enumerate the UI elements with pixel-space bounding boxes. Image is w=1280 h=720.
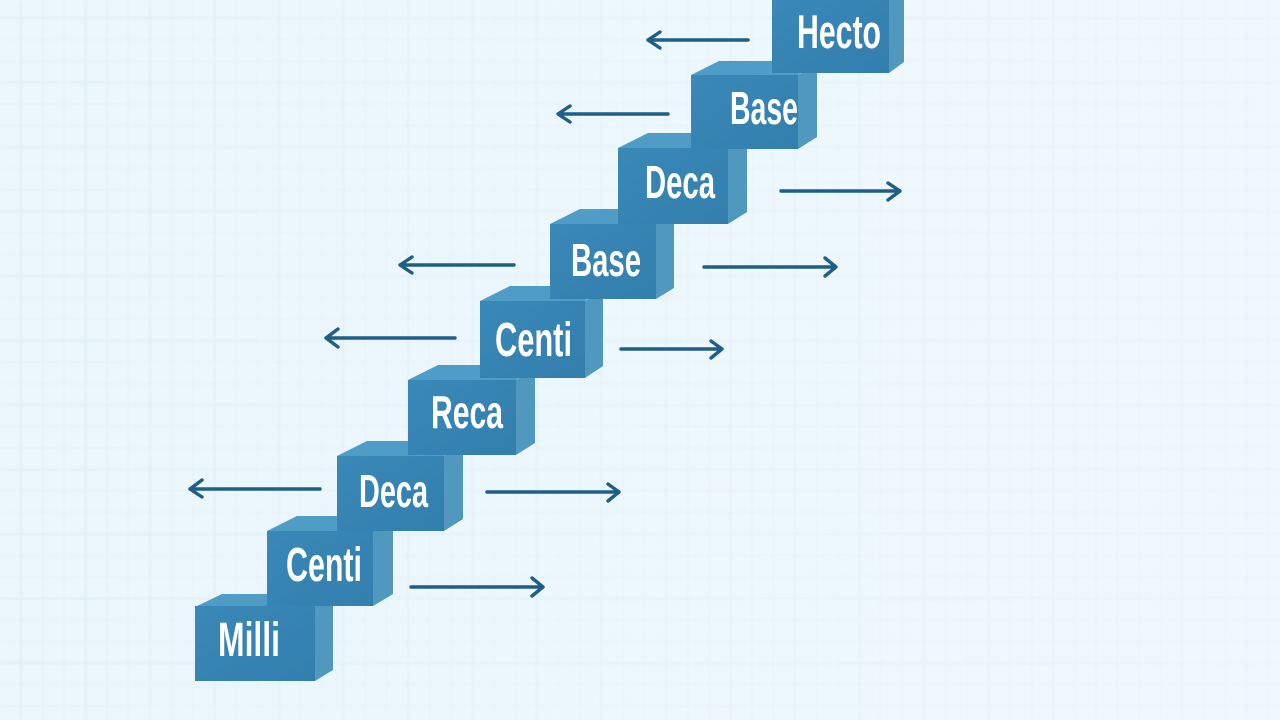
step: Deca <box>337 441 463 531</box>
arrow: right from Deca <box>781 183 900 200</box>
step: Base lower <box>550 209 674 299</box>
arrow: left from Deca lower <box>190 480 320 497</box>
arrow: right from Deca lower <box>487 484 619 501</box>
arrow: right from Centi lower <box>411 578 543 596</box>
step: Hecto: Hecto <box>797 5 881 58</box>
step: Base upper <box>691 61 817 149</box>
step: Centi upper <box>480 286 603 378</box>
arrow: left from Centi <box>326 329 455 347</box>
step: Milli <box>195 594 333 681</box>
step: Centi: Centi <box>286 539 362 592</box>
step: Deca: Deca <box>359 465 428 517</box>
step: Centi <box>267 516 393 606</box>
arrow: right from Centi <box>621 341 722 358</box>
arrow: left from Hecto <box>648 32 748 48</box>
arrow: right from Base lower <box>704 258 836 276</box>
arrow: left from Base lower <box>400 257 514 273</box>
step: Deca upper <box>618 133 747 224</box>
step: Centi upper: Centi <box>495 314 572 367</box>
step: Milli: Milli <box>218 614 280 667</box>
step: Reca: Reca <box>431 386 503 438</box>
step: Base upper: Base <box>730 82 798 134</box>
arrow: left from Base <box>558 106 668 122</box>
step: Reca <box>408 365 535 455</box>
step: Hecto <box>772 0 904 73</box>
step: Base lower: Base <box>571 234 641 286</box>
step: Deca upper: Deca <box>645 156 715 208</box>
